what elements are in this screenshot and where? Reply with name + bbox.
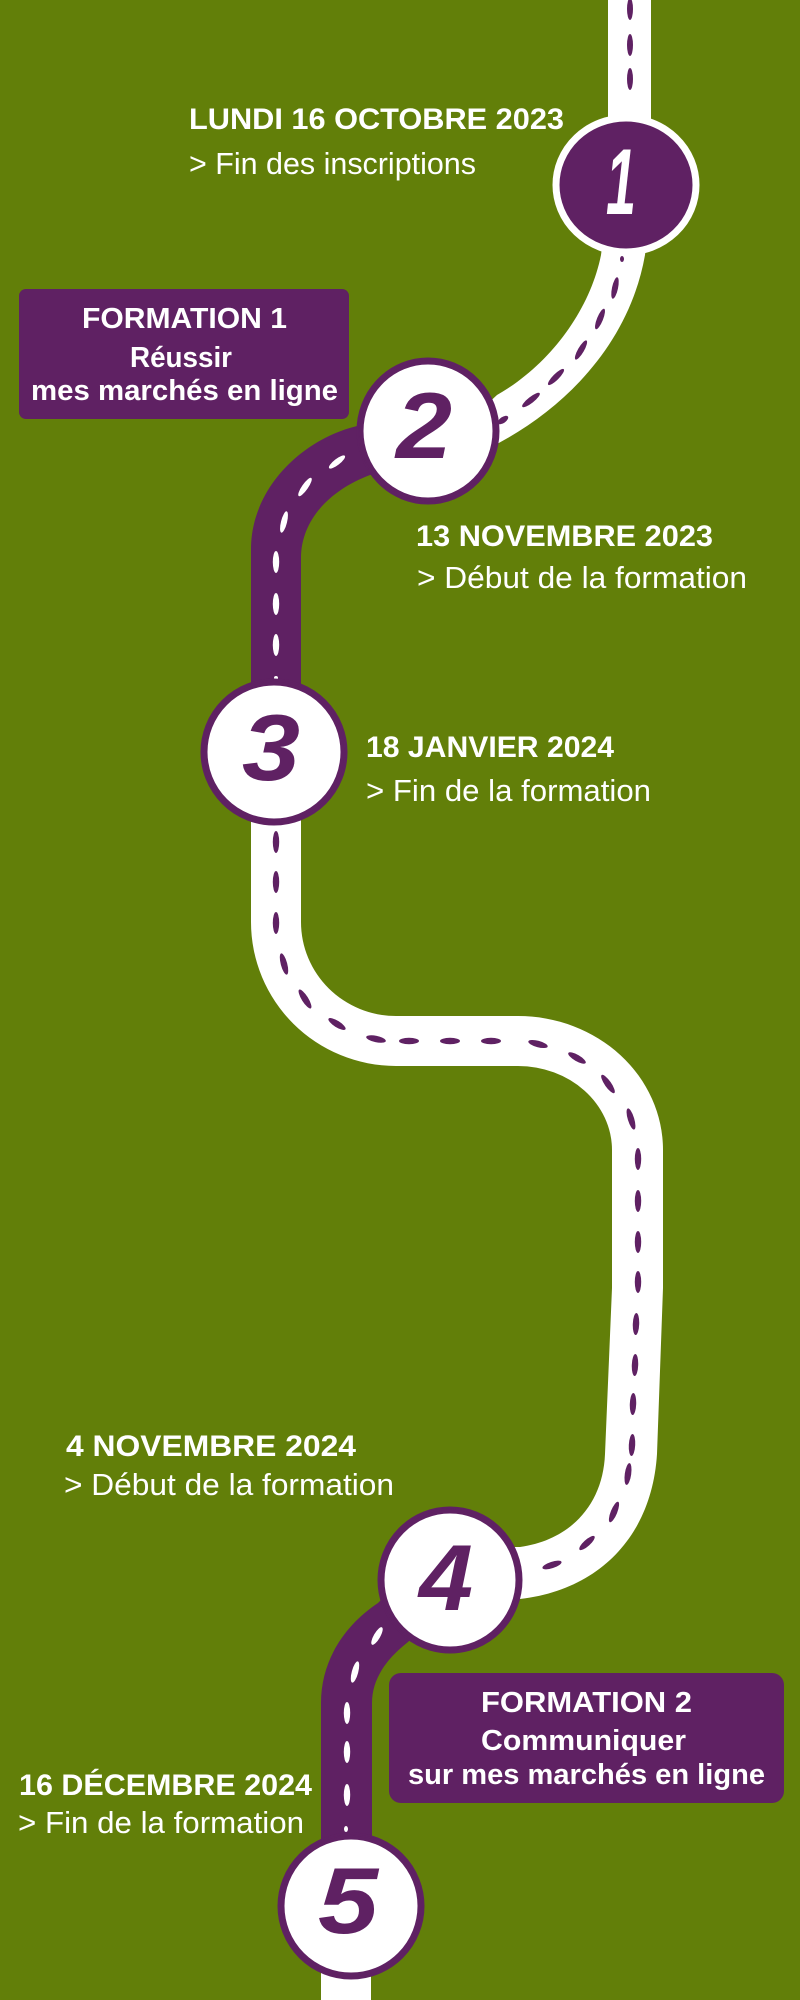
panel: formation 1: FORMATION 1 [82, 303, 287, 335]
step 3 marker: 3 [242, 695, 300, 800]
date label: step 3 [366, 731, 651, 808]
date label: step 1: LUNDI 16 OCTOBRE 2023 [189, 103, 564, 136]
step 2 marker [348, 349, 508, 513]
date label: step 2: > Début de la formation [417, 560, 747, 595]
date label: step 5 [18, 1768, 312, 1840]
date label: step 4: 4 NOVEMBRE 2024 [66, 1430, 356, 1463]
step 1 marker: 1 [606, 129, 636, 234]
panel: formation 1: mes marchés en ligne [31, 375, 338, 407]
panel: formation 1 [19, 289, 349, 419]
date label: step 2: 13 NOVEMBRE 2023 [416, 520, 713, 553]
road: purple segment from step 4 to step 5 [321, 1580, 430, 1860]
step 1 marker [545, 108, 705, 262]
panel: formation 2: Communiquer [481, 1725, 686, 1757]
panel: formation 2 [389, 1673, 784, 1803]
step 5 marker [269, 1824, 433, 1988]
date label: step 1: > Fin des inscriptions [189, 146, 476, 181]
date label: step 4 [64, 1430, 394, 1502]
road: white end stub below step 5 [321, 1960, 371, 2000]
date label: step 5: > Fin de la formation [18, 1805, 304, 1840]
step 4 marker [369, 1498, 531, 1662]
date label: step 2 [416, 520, 747, 595]
step 4 marker: 4 [417, 1525, 473, 1630]
step 2 marker: 2 [394, 373, 452, 478]
step 5 marker: 5 [318, 1848, 380, 1953]
date label: step 3: > Fin de la formation [366, 773, 651, 808]
date label: step 5: 16 DÉCEMBRE 2024 [19, 1768, 312, 1802]
panel: formation 2: FORMATION 2 [481, 1687, 692, 1719]
panel: formation 1: Réussir [130, 342, 232, 374]
panel: formation 2: sur mes marchés en ligne [408, 1759, 765, 1791]
road: long white segment from step 3 to step 4 [251, 800, 663, 1599]
date label: step 1 [189, 103, 564, 181]
date label: step 4: > Début de la formation [64, 1467, 394, 1502]
road: top white segment to step 2 [470, 0, 651, 444]
step 3 marker [192, 670, 356, 834]
date label: step 3: 18 JANVIER 2024 [366, 731, 614, 764]
road: purple segment from step 2 to step 3 [251, 410, 410, 710]
